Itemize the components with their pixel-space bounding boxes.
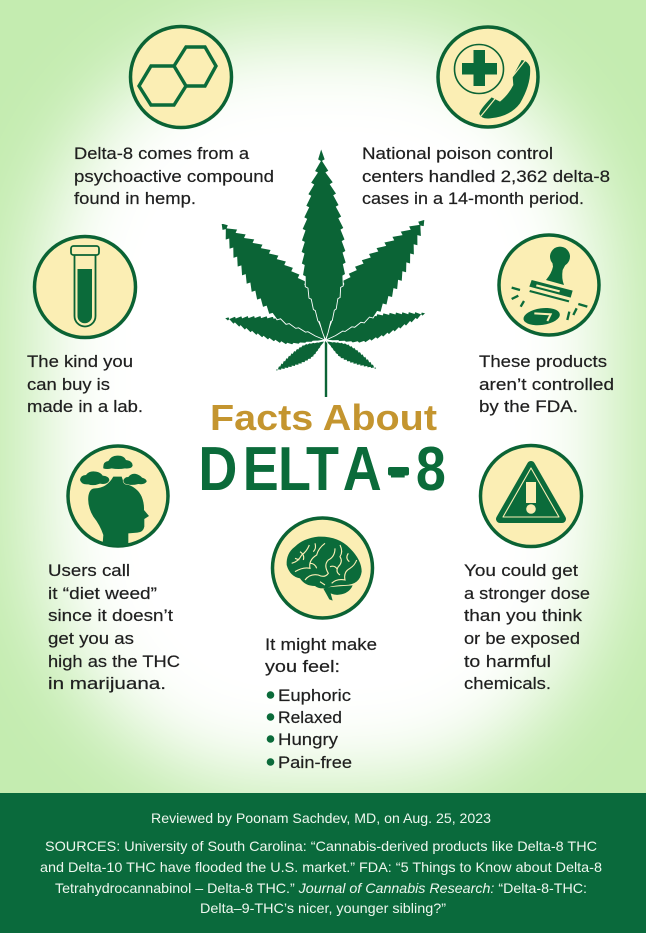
sources: Tetrahydrocannabinol – Delta-8 THC.” Journal of Cannabis Research: “Delta-8-THC:: [55, 880, 587, 896]
icon: warning triangle: [480, 446, 582, 546]
bullet list: Relaxed: [278, 709, 342, 727]
text: made in a lab: [27, 353, 143, 416]
text: might make you feel: [265, 636, 377, 772]
text: diet weed: it “diet weed”: [48, 585, 157, 603]
sources: SOURCES: University of South Carolina: “Cannabis-derived products like Delta-8 THC: [45, 838, 597, 854]
text: stronger dose: chemicals.: [464, 675, 551, 693]
text: poison control cases: National poison control: [362, 145, 553, 163]
text: stronger dose: or be exposed: [464, 630, 580, 648]
text: diet weed: in marijuana.: [48, 675, 166, 693]
text: intro: It might make: [265, 636, 377, 654]
text: stronger dose: You could get: [464, 562, 578, 580]
icon: brain: [272, 518, 372, 618]
text: not controlled by FDA: by the FDA.: [479, 398, 578, 416]
icon: poison control phone: [438, 27, 538, 127]
text: made in a lab: The kind you: [27, 353, 133, 371]
text: made in a lab: made in a lab.: [27, 398, 143, 416]
text: stronger dose: than you think: [464, 607, 583, 625]
text: hemp compound: Delta-8 comes from a: [74, 145, 250, 163]
text: diet weed: get you as: [48, 630, 134, 648]
text: hemp compound: psychoactive compound: [74, 168, 274, 186]
text: stronger dose: [464, 562, 590, 693]
title: Facts About: Facts About: [210, 397, 437, 438]
text: intro: you feel:: [265, 658, 340, 676]
sources: [40, 838, 602, 916]
text: poison control cases: cases in a 14-month period.: [362, 190, 584, 208]
icon: stamp: [499, 235, 599, 335]
text: diet weed: [48, 562, 180, 693]
text: not controlled by FDA: [479, 353, 614, 416]
icon: test tube: [34, 236, 136, 338]
text: stronger dose: a stronger dose: [464, 585, 590, 603]
text: hemp compound: [74, 145, 274, 208]
bullet list: Euphoric: [278, 687, 351, 705]
icon: head with clouds: [68, 446, 168, 546]
bullet list: [267, 687, 352, 772]
text: hemp compound: found in hemp.: [74, 190, 196, 208]
text: intro: [265, 636, 377, 676]
text: stronger dose: to harmful: [464, 653, 551, 671]
icon: hexagons: [130, 26, 232, 128]
footer panel: [0, 793, 646, 933]
cannabis leaf: [202, 148, 444, 397]
text: made in a lab: can buy is: [27, 376, 110, 394]
title: Delta-8: DELTA-8: [198, 435, 446, 504]
text: not controlled by FDA: aren’t controlled: [479, 376, 614, 394]
text: diet weed: high as the THC: [48, 653, 180, 671]
text: diet weed: Users call: [48, 562, 130, 580]
text: poison control cases: [362, 145, 610, 208]
bullet list: Pain-free: [278, 754, 352, 772]
bullet list: Hungry: [278, 731, 339, 749]
review credit: Reviewed by Poonam Sachdev, MD, on Aug. 25, 2023: [151, 810, 491, 826]
sources: Delta–9-THC’s nicer, younger sibling?”: [200, 900, 446, 916]
text: not controlled by FDA: These products: [479, 353, 607, 371]
sources: and Delta-10 THC have flooded the U.S. market.” FDA: “5 Things to Know about Delta-8: [40, 859, 602, 875]
text: poison control cases: centers handled 2,362 delta-8: [362, 168, 610, 186]
text: diet weed: since it doesn’t: [48, 607, 173, 625]
